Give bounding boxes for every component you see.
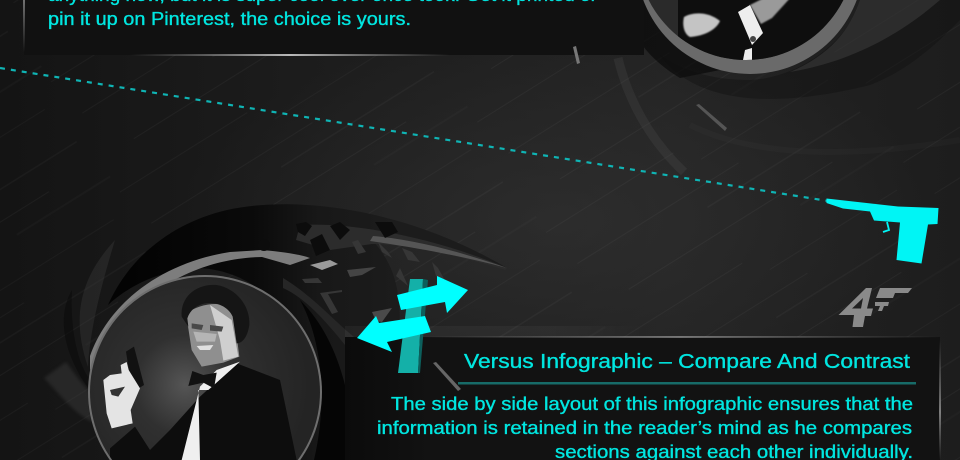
upper swirl bands	[618, 0, 960, 172]
panel: versus infographic	[345, 326, 941, 460]
heading: Versus Infographic – Compare And Contrast	[464, 351, 911, 373]
icon: wrist	[750, 0, 792, 24]
pistol	[126, 347, 144, 392]
body text: information is retained in the reader’s mind as he compares	[377, 418, 912, 438]
tire track tread	[258, 222, 507, 322]
face	[186, 304, 239, 367]
hand	[103, 362, 140, 428]
suit	[110, 363, 297, 460]
icon: arrow right	[397, 276, 468, 313]
stray grey mark	[433, 362, 461, 391]
top description text	[48, 0, 597, 29]
icon: hand	[683, 13, 720, 37]
body text: The side by side layout of this infographic ensures that the	[391, 394, 913, 414]
panel rule	[458, 382, 916, 384]
panel: top description	[23, 0, 644, 56]
shirt	[182, 362, 240, 460]
body text	[377, 394, 913, 460]
grey crescent over portrait	[90, 250, 310, 370]
icon: shirt cuff	[738, 5, 763, 45]
icon: signpost with arrows	[357, 276, 468, 373]
dotted bullet trail	[0, 68, 828, 201]
stray grey marks	[573, 46, 727, 131]
portrait: top figure in circle	[636, 0, 864, 74]
lower swirl: gun-barrel spiral	[44, 204, 507, 460]
icon: cyan pistol	[826, 198, 938, 264]
logo: 4T	[838, 288, 912, 327]
icon: arrow left	[357, 316, 431, 352]
hair	[182, 285, 249, 343]
top description text: pin it up on Pinterest, the choice is yours.	[48, 9, 411, 29]
bow tie	[188, 371, 217, 388]
portrait: agent with pistol	[88, 275, 322, 460]
